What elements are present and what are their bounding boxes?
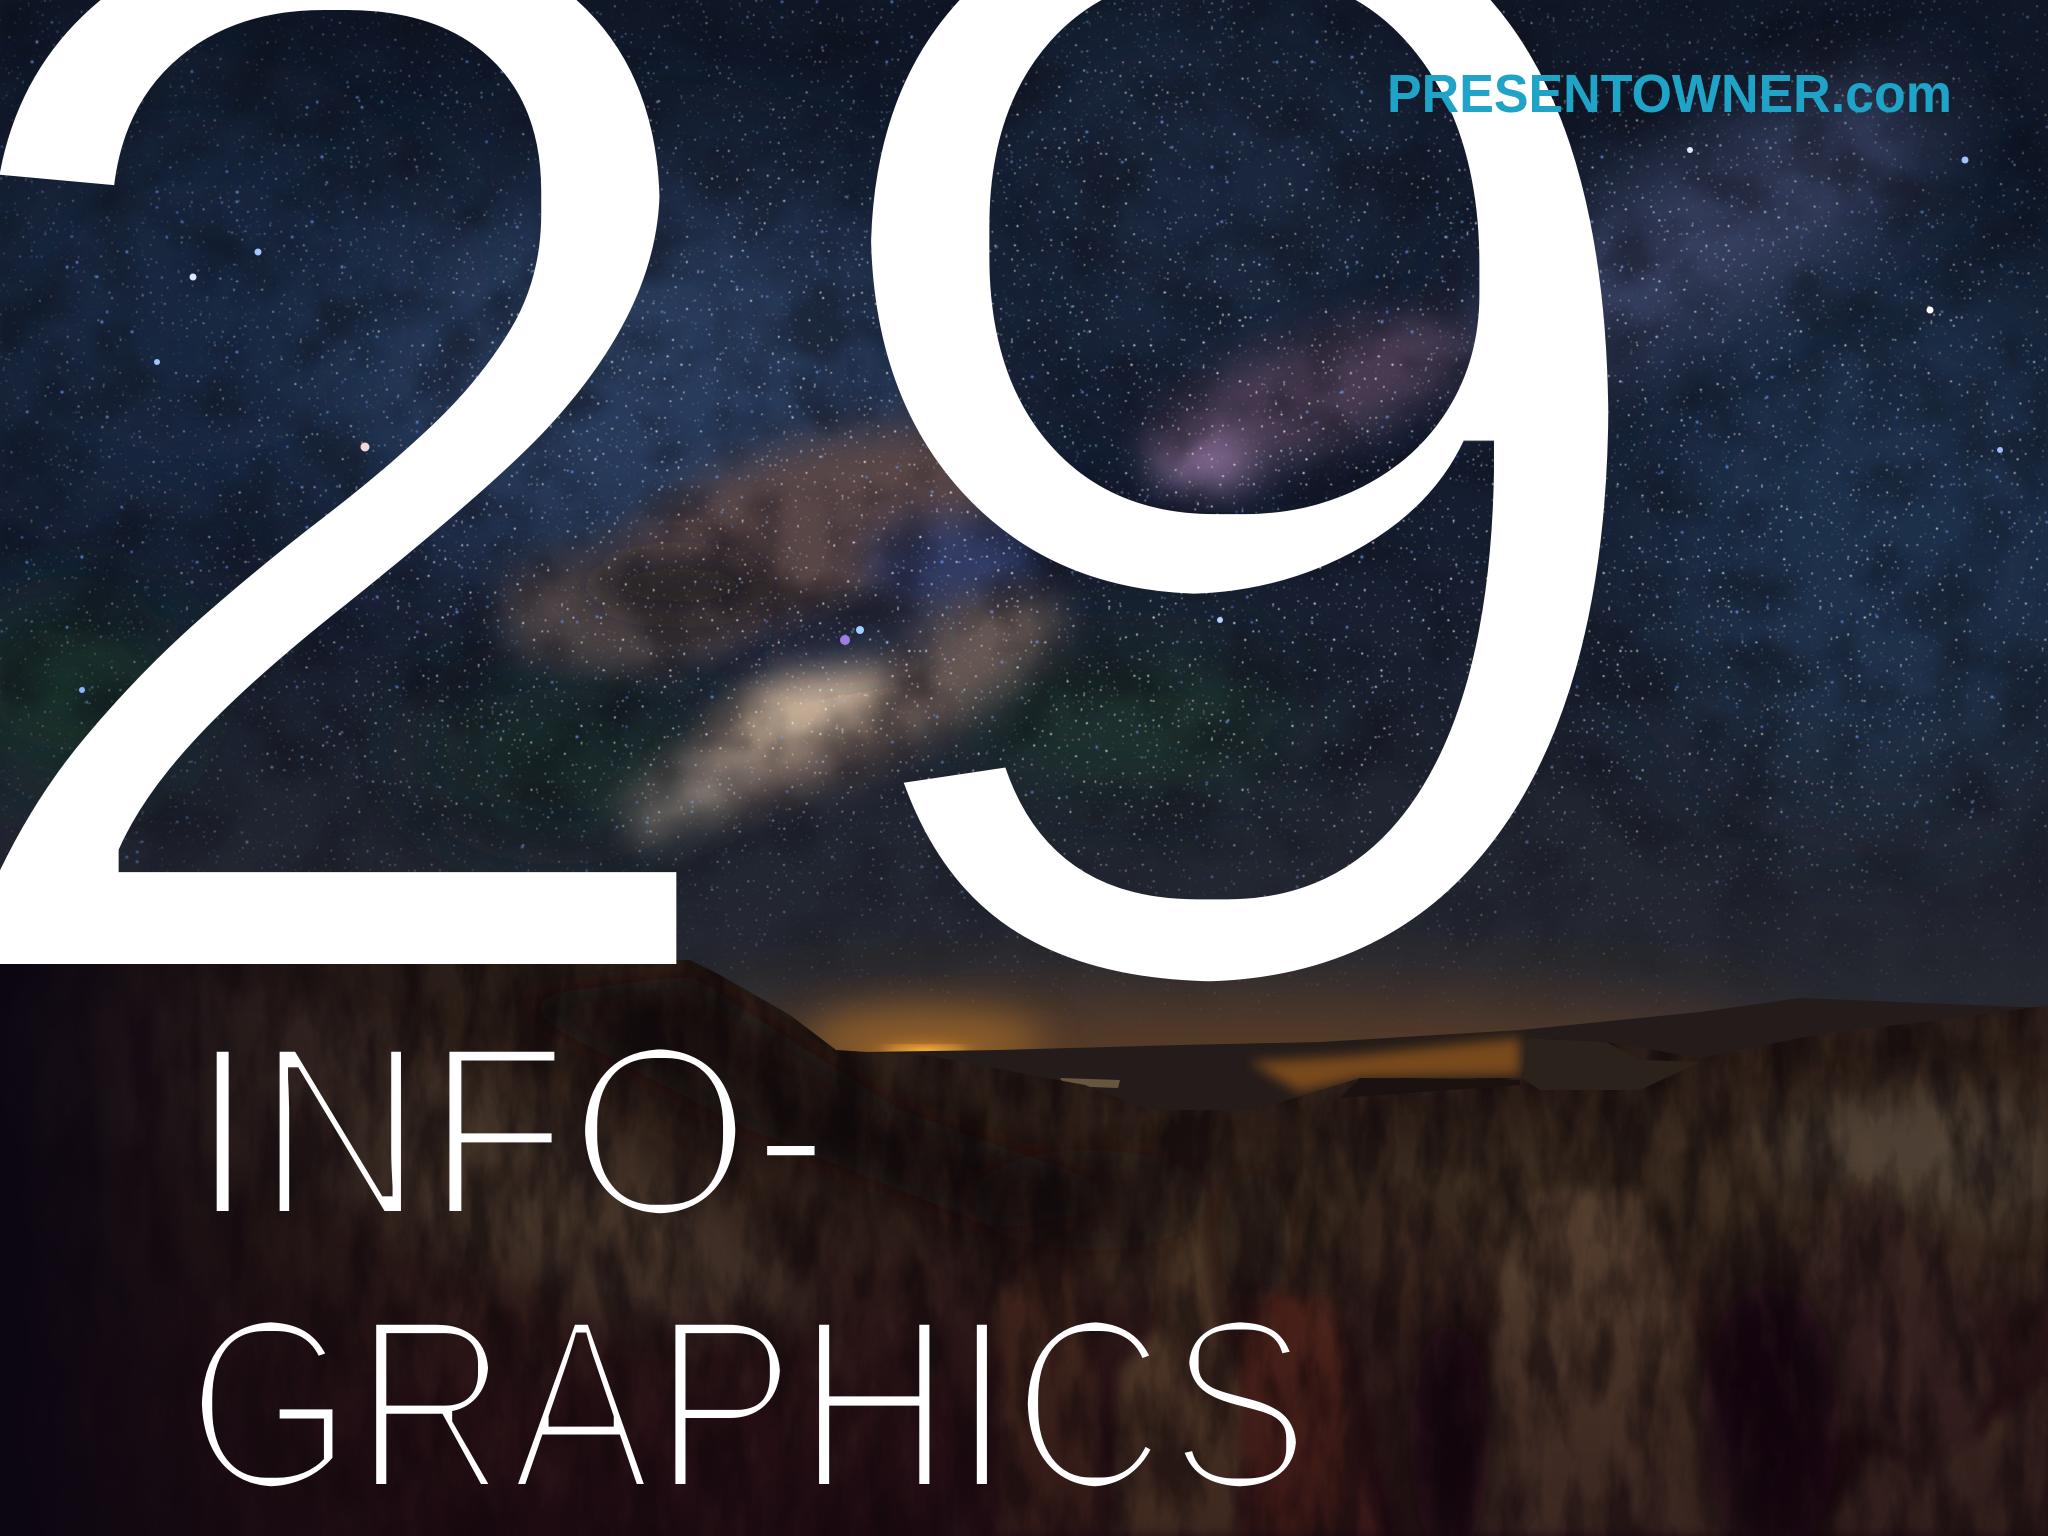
horizon glow	[670, 995, 1790, 1115]
milky way band	[0, 2, 2048, 867]
plateau mesa	[1522, 1038, 1700, 1090]
deep shadows	[1700, 1280, 1840, 1536]
starfield	[0, 0, 2048, 1040]
hoodoos	[1110, 1170, 1245, 1536]
title: INFO-GRAPHICS	[186, 994, 1311, 1536]
canyon rock formations	[0, 950, 2048, 1536]
brand logo: PRESENTOWNER.com	[1387, 64, 1952, 124]
title: INFO-GRAPHICS: GRAPHICS	[186, 1267, 1311, 1536]
big number 29	[0, 0, 1702, 1317]
lit left slope	[206, 995, 816, 1328]
distant ridges	[800, 998, 2048, 1200]
title: INFO-GRAPHICS: INFO-	[190, 994, 830, 1269]
